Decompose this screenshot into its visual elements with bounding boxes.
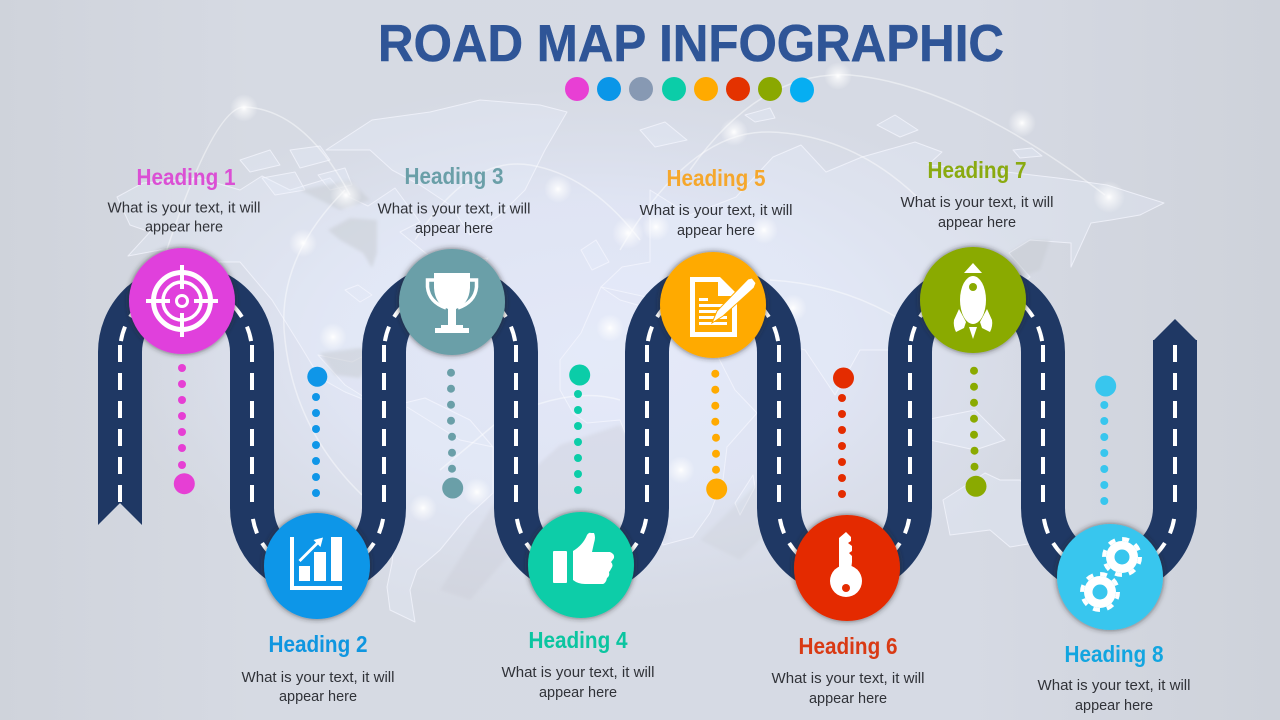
text block 2: What is your text, it will — [242, 669, 394, 686]
text block 8: What is your text, it will — [1038, 677, 1190, 694]
badge 3: trophy — [399, 249, 505, 355]
marker 2: dotted line — [307, 367, 327, 497]
badge 7: rocket — [920, 247, 1026, 353]
world map — [117, 100, 1164, 622]
text block 3: What is your text, it will — [378, 200, 530, 218]
title: ROAD MAP INFOGRAPHIC — [378, 15, 1004, 73]
text block 6 — [772, 633, 924, 707]
text block 3 — [378, 163, 530, 237]
text block 8: appear here — [1075, 697, 1153, 714]
badge 4: thumbs up — [528, 512, 634, 618]
text block 2: appear here — [279, 688, 357, 705]
text block 1: appear here — [145, 218, 223, 236]
marker 8: dotted line — [1095, 376, 1116, 505]
text block 6: Heading 6 — [798, 633, 898, 659]
text block 1 — [108, 164, 260, 236]
marker 5: dotted line — [706, 370, 727, 500]
badge 2: bar chart — [264, 513, 370, 619]
text block 8 — [1038, 641, 1190, 714]
text block 5: What is your text, it will — [640, 202, 792, 219]
text block 7: What is your text, it will — [900, 194, 1054, 211]
text block 6: appear here — [809, 690, 887, 707]
lane markings: curves — [120, 286, 1175, 574]
light glows — [230, 62, 1125, 522]
road start ribbon — [98, 495, 142, 525]
marker 3: dotted line — [442, 369, 463, 498]
text block 5 — [640, 165, 792, 239]
winding road — [98, 286, 1197, 574]
marker 4: dotted line — [569, 364, 590, 494]
lane markings: straights — [120, 345, 1175, 502]
text block 3: Heading 3 — [404, 163, 504, 189]
text block 7 — [900, 157, 1054, 231]
text block 2 — [242, 631, 394, 705]
text block 4: What is your text, it will — [502, 664, 654, 681]
text block 7: Heading 7 — [928, 157, 1026, 183]
light arcs — [165, 75, 1105, 495]
text block 5: Heading 5 — [666, 165, 766, 191]
marker 6: dotted line — [833, 368, 854, 498]
text block 4: Heading 4 — [528, 627, 628, 653]
text block 1: What is your text, it will — [108, 200, 260, 216]
badge 5: document and pencil — [660, 252, 766, 358]
marker 1: dotted line — [174, 364, 195, 494]
text block 8: Heading 8 — [1064, 641, 1164, 667]
map shadow regions — [300, 180, 1050, 600]
text block 7: appear here — [938, 214, 1016, 231]
text block 2: Heading 2 — [268, 631, 368, 657]
text block 1: Heading 1 — [136, 164, 236, 190]
text block 6: What is your text, it will — [772, 670, 924, 687]
marker 7: dotted line — [966, 367, 986, 497]
road surface — [120, 286, 1175, 574]
text block 3: appear here — [415, 220, 493, 237]
road end arrow — [1153, 319, 1197, 341]
badge 8: gears — [1057, 524, 1163, 630]
badge 1: target — [129, 248, 235, 354]
colour dots row — [565, 77, 814, 102]
text block 4: appear here — [539, 684, 617, 701]
badge 6: key — [794, 515, 900, 621]
text block 4 — [502, 627, 654, 701]
text block 5: appear here — [677, 222, 755, 239]
